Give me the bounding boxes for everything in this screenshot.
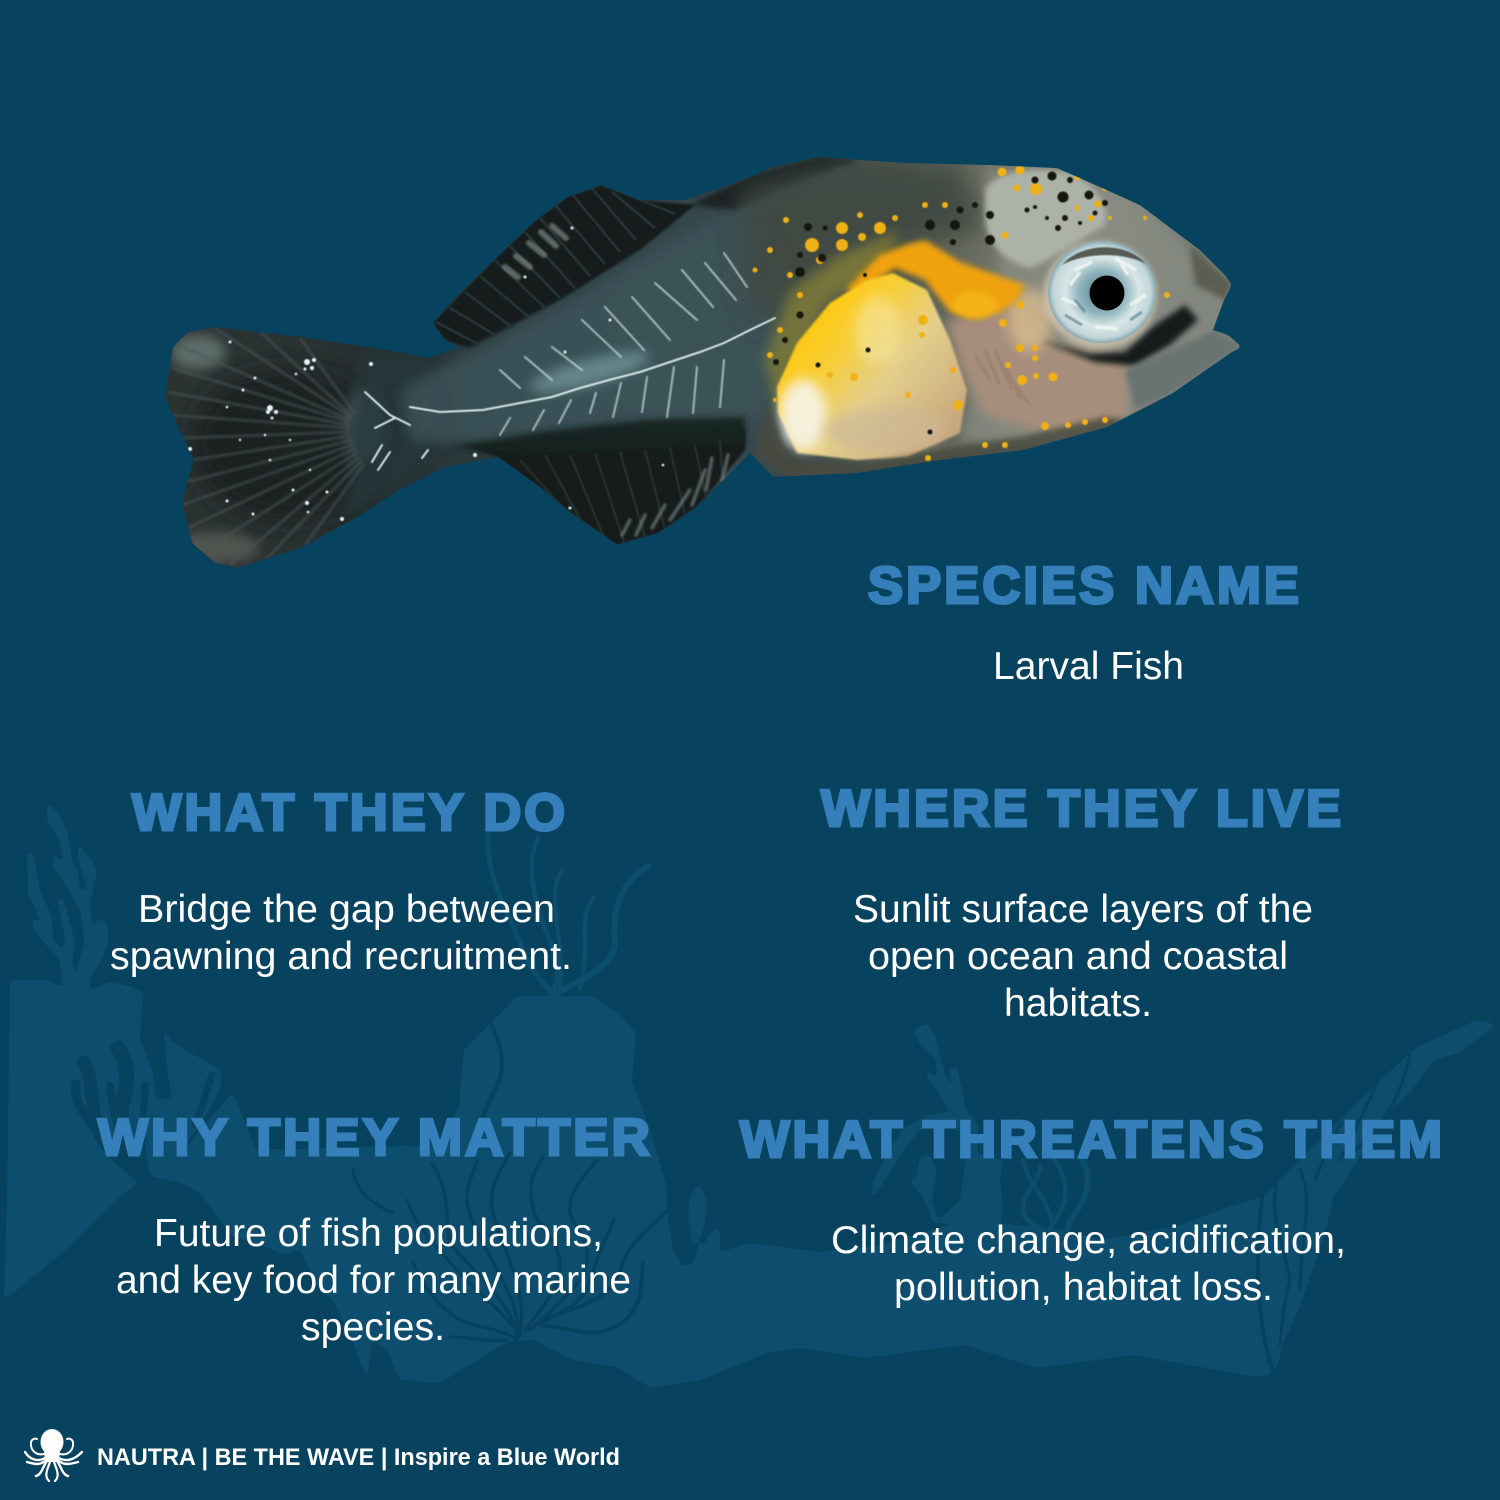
sparkles xyxy=(188,226,664,521)
fish body base xyxy=(160,150,1250,575)
text: why they matter: Future of fish populations, xyxy=(154,1212,603,1255)
anal fin highlights xyxy=(622,455,728,535)
golden haze behind spots xyxy=(765,230,900,420)
icon: octopus logo xyxy=(25,1429,82,1481)
tail shading xyxy=(170,329,400,567)
heading: species name: SPECIES NAME xyxy=(868,557,1302,615)
orange band xyxy=(845,240,1025,318)
tail base bright marks xyxy=(365,392,428,470)
orange blob xyxy=(953,292,997,318)
eye glow xyxy=(1043,241,1157,349)
brain patch xyxy=(985,170,1106,268)
dark flank band xyxy=(450,417,745,457)
text: where they live: open ocean and coastal xyxy=(868,935,1288,978)
heading: what they do: WHAT THEY DO xyxy=(132,784,568,842)
upper trunk dark olive xyxy=(740,165,985,330)
text: where they live: Sunlit surface layers of the xyxy=(853,888,1313,931)
central rock, reef mass and seabed xyxy=(175,996,1493,1388)
body strip xyxy=(400,195,790,445)
left rock with coral xyxy=(4,980,222,1300)
eye xyxy=(1048,241,1156,343)
head translucent xyxy=(960,168,1245,445)
tail rays xyxy=(168,328,364,565)
yolk lower tint xyxy=(825,408,945,452)
light seaweed strands xyxy=(488,835,1088,1236)
text: why they matter: species. xyxy=(301,1306,445,1349)
anal fin xyxy=(470,430,745,545)
black spots xyxy=(773,172,1108,434)
text: what they do: spawning and recruitment. xyxy=(110,935,572,978)
yolk highlight xyxy=(779,379,827,451)
reef silhouette background xyxy=(4,802,1493,1388)
text: what threatens them: pollution, habitat loss. xyxy=(894,1266,1273,1309)
mouth dark band xyxy=(1040,305,1198,366)
yellow and orange spots xyxy=(752,166,1170,473)
back streak xyxy=(690,155,860,210)
right seaweed main xyxy=(872,1023,978,1223)
cream glow before eye xyxy=(1008,288,1052,352)
heading: what threatens them: WHAT THREATENS THEM xyxy=(740,1111,1445,1169)
footer brand line: NAUTRA | BE THE WAVE | Inspire a Blue World xyxy=(97,1444,620,1471)
spine line xyxy=(410,318,775,412)
heading: why they matter: WHY THEY MATTER xyxy=(98,1109,653,1167)
text: what they do xyxy=(110,888,572,978)
gut peach xyxy=(945,300,1130,435)
lower jaw xyxy=(1125,330,1242,410)
seaweed cut-outs over the reef xyxy=(75,1022,1410,1372)
mid-body glow xyxy=(527,343,653,401)
text: what threatens them: Climate change, acidification, xyxy=(831,1219,1346,1262)
small lobes near centre rock xyxy=(689,1186,706,1245)
text: what threatens them xyxy=(831,1219,1346,1309)
ribs xyxy=(500,253,747,435)
larval fish illustration xyxy=(160,150,1250,575)
anal fin rays xyxy=(520,440,722,545)
dorsal fin xyxy=(433,185,695,348)
gill ridges xyxy=(975,350,1030,405)
snout tip xyxy=(1190,245,1232,300)
text: species value: Larval Fish xyxy=(993,645,1184,688)
text: where they live: habitats. xyxy=(1004,982,1152,1025)
yolk sac xyxy=(777,273,967,460)
dorsal fin rays xyxy=(436,186,675,345)
text: what they do: Bridge the gap between xyxy=(138,888,555,931)
dorsal fin highlights xyxy=(505,226,566,277)
belly fringe xyxy=(757,406,1126,476)
heading: where they live: WHERE THEY LIVE xyxy=(821,780,1344,838)
text: where they live xyxy=(853,888,1313,1025)
text: why they matter xyxy=(116,1212,631,1349)
text: why they matter: and key food for many marine xyxy=(116,1259,631,1302)
left seaweed frond xyxy=(27,802,109,990)
